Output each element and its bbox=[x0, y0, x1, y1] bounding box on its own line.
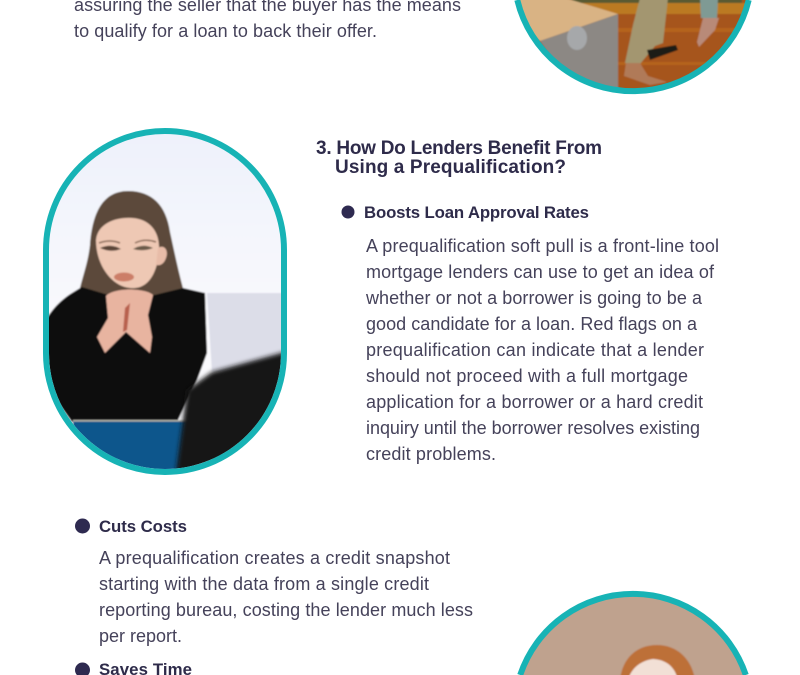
bullet: Cuts Costs: Cuts Costs bbox=[99, 517, 187, 536]
paragraph: loan approval: inquiry until the borrower resolves existing bbox=[366, 418, 700, 438]
intro text block bbox=[74, 0, 461, 41]
paragraph: loan approval bbox=[365, 236, 719, 464]
intro text block: to qualify for a loan to back their offer. bbox=[74, 21, 377, 41]
bullet: Boosts Loan Approval Rates: Boosts Loan Approval Rates bbox=[364, 203, 589, 222]
paragraph: loan approval: A prequalification soft pull is a front-line tool bbox=[366, 236, 719, 256]
ring bbox=[517, 0, 749, 91]
paragraph: loan approval: credit problems. bbox=[366, 444, 496, 464]
paragraph: cuts costs: per report. bbox=[99, 626, 182, 646]
photo: moving box and legs on wood floor bbox=[510, 0, 760, 98]
paragraph: cuts costs: starting with the data from a single credit bbox=[99, 574, 429, 594]
paragraph: loan approval: application for a borrower or a hard credit bbox=[366, 392, 703, 412]
paragraph: cuts costs: reporting bureau, costing the lender much less bbox=[99, 600, 473, 620]
ring bbox=[46, 131, 284, 472]
ring bbox=[520, 594, 746, 675]
paragraph: loan approval: prequalification can indicate that a lender bbox=[366, 340, 704, 360]
paragraph: loan approval: mortgage lenders can use to get an idea of bbox=[366, 262, 715, 282]
section heading bbox=[316, 138, 602, 178]
photo: woman with hands under chin bbox=[45, 130, 285, 480]
paragraph: cuts costs bbox=[99, 548, 473, 646]
paragraph: cuts costs: A prequalification creates a credit snapshot bbox=[99, 548, 450, 568]
section heading: Using a Prequalification? bbox=[335, 157, 566, 178]
section heading: 3. How Do Lenders Benefit From bbox=[316, 138, 602, 159]
paragraph: loan approval: whether or not a borrower is going to be a bbox=[365, 288, 703, 308]
paragraph: loan approval: good candidate for a loan. Red flags on a bbox=[366, 314, 698, 334]
paragraph: loan approval: should not proceed with a full mortgage bbox=[366, 366, 688, 386]
photo: red-haired woman bbox=[510, 590, 760, 675]
